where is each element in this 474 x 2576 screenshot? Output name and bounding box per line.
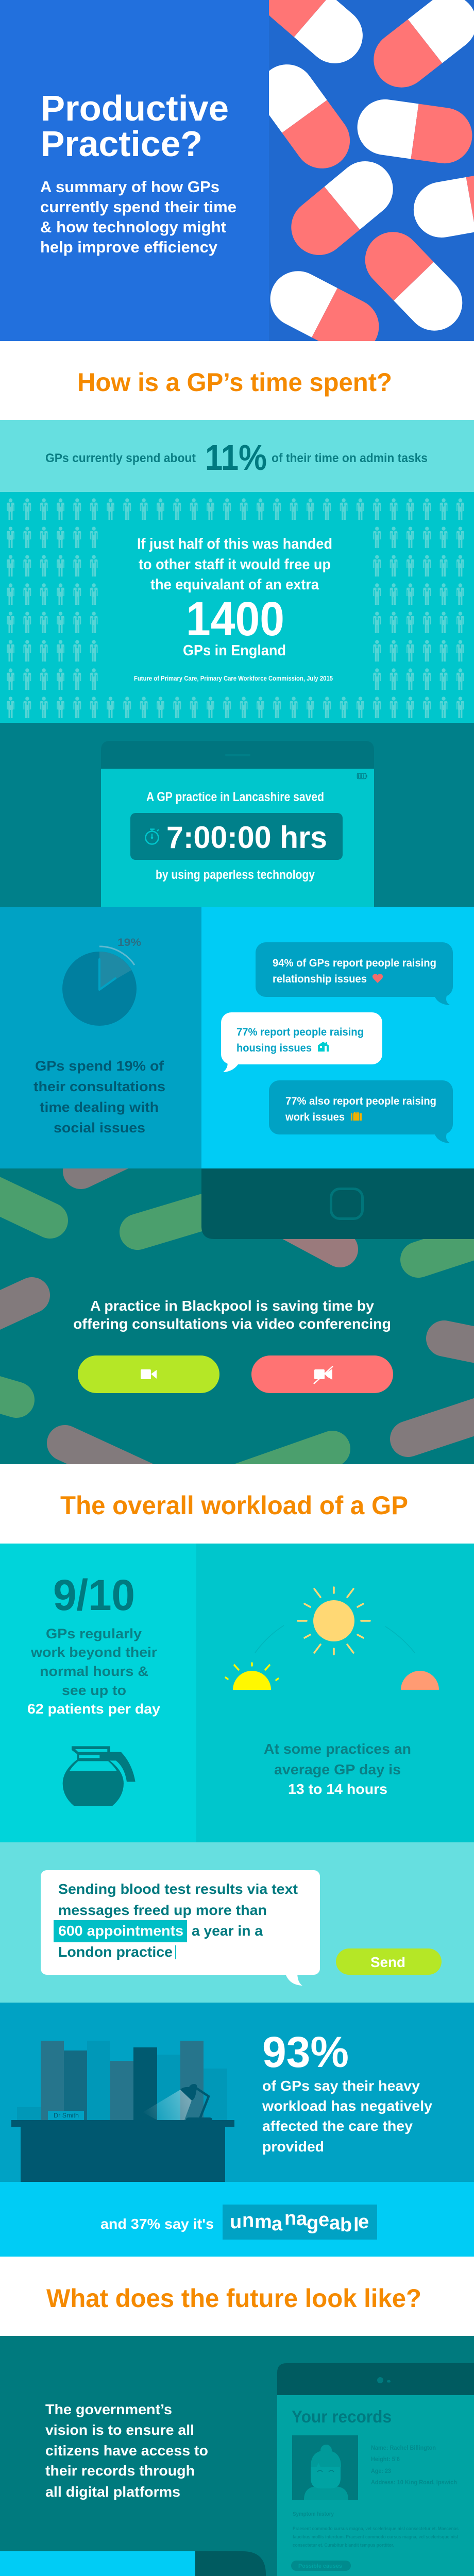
- send button: [336, 1948, 442, 1975]
- symptom history: Praesent commodo cursus magna, vel scelerisque nisl consectetur et. Maecenas: [293, 2526, 459, 2531]
- extra GPs text: GPs in England: [183, 642, 286, 659]
- social issues text: social issues: [54, 1120, 145, 1136]
- panel: text message callout: [0, 1842, 474, 2003]
- people pattern: [6, 498, 473, 719]
- icon: coffee pot: [63, 1746, 136, 1806]
- subtitle: currently spend their time: [40, 198, 236, 216]
- panel: unmanageable: and 37% say it's: [100, 2216, 214, 2232]
- vision text: all digital platforms: [45, 2484, 180, 2500]
- vision text: citizens have access to: [45, 2443, 208, 2459]
- icon: rising sun: [226, 1663, 278, 1690]
- name plate: [48, 2111, 84, 2120]
- subtitle: A summary of how GPs: [40, 178, 219, 196]
- GP day text: [264, 1741, 411, 1797]
- message bubble: a year in a: [192, 1923, 263, 1939]
- icon: desk lamp: [180, 2084, 212, 2120]
- panel: video conferencing: [0, 1168, 474, 1464]
- bubble: housing issues: housing issues: [236, 1042, 312, 1054]
- social issues text: [33, 1058, 165, 1136]
- message bubble: 600 appointments: [58, 1923, 183, 1939]
- subtitle: help improve efficiency: [40, 238, 218, 256]
- icon: heart: [373, 974, 383, 983]
- panel: 9 out of 10 GPs: 9/10: [53, 1571, 135, 1619]
- patient portrait: [292, 2435, 358, 2500]
- pills illustration: [269, 0, 474, 341]
- bubble: relationship issues: 94% of GPs report people raising: [273, 957, 436, 969]
- social issues text: GPs spend 19% of: [35, 1058, 164, 1074]
- timer box: 7:00:00 hrs: [166, 820, 327, 855]
- panel: real time data: [0, 2551, 474, 2576]
- bubble: relationship issues: [256, 942, 453, 1005]
- panel: unmanageable: [0, 2182, 474, 2257]
- 93 percent text: provided: [262, 2139, 324, 2155]
- panel: extra GPs with people pattern: [0, 492, 474, 723]
- icon: battery: [358, 773, 367, 779]
- send button: Send: [370, 1954, 405, 1970]
- extra GPs text: Future of Primary Care, Primary Care Workforce Commission, July 2015: [134, 674, 333, 682]
- extra GPs text: to other staff it would free up: [139, 556, 331, 573]
- panel: length of a GP day: [196, 1544, 474, 1842]
- tablet caption: by using paperless technology: [156, 868, 315, 882]
- icon: stopwatch: [145, 829, 159, 844]
- symptom history: faucibus mollis interdum. Praesent commodo cursus magna, vel scelerisque nisl: [293, 2534, 458, 2539]
- bubble: housing issues: 77% report people raising: [236, 1026, 364, 1038]
- title: Productive: [41, 88, 229, 128]
- GP day text: average GP day is: [274, 1761, 401, 1777]
- extra GPs text: If just half of this was handed: [137, 536, 332, 552]
- extra GPs text: the equivalant of an extra: [150, 577, 319, 593]
- symptom history: consectetur et. Curabitur blandit tempus porttitor.: [293, 2543, 394, 2548]
- panel: government vision: [0, 2336, 474, 2576]
- panel: 9 out of 10 GPs: [0, 1544, 196, 1842]
- desk: [11, 2120, 234, 2182]
- books: [17, 2041, 227, 2120]
- overtime text: see up to: [62, 1683, 126, 1698]
- extra GPs text: 1400: [186, 592, 284, 646]
- message bubble: London practice: [58, 1944, 173, 1960]
- bubble: housing issues: [221, 1012, 382, 1072]
- bubble: work issues: [269, 1080, 453, 1143]
- overtime text: [27, 1626, 160, 1717]
- overtime text: normal hours &: [40, 1664, 148, 1679]
- patient details: Age: 23: [371, 2467, 391, 2475]
- vision text: [45, 2401, 208, 2500]
- phone bottom: [201, 1168, 474, 1239]
- pie chart 19%: [62, 937, 141, 1026]
- panel: admin tasks stat: 11%: [205, 437, 267, 478]
- message bubble: messages freed up more than: [58, 1902, 267, 1918]
- overtime text: 62 patients per day: [27, 1701, 160, 1717]
- wavy word: unmanageable: [230, 2208, 369, 2236]
- pie chart 19%: 19%: [117, 937, 141, 948]
- subtitle: [40, 178, 236, 256]
- vision text: their records through: [45, 2463, 195, 2479]
- panel: admin tasks stat: GPs currently spend about: [45, 451, 196, 465]
- tablet: your records: [277, 2363, 474, 2576]
- 93 percent text: of GPs say their heavy: [262, 2078, 420, 2094]
- 93 percent text: affected the care they: [262, 2118, 413, 2134]
- GP day text: At some practices an: [264, 1741, 411, 1757]
- icon: briefcase: [351, 1112, 362, 1121]
- tablet: [101, 741, 374, 769]
- sun arcs: [255, 1625, 415, 1653]
- panel: admin tasks stat: [0, 420, 474, 492]
- vision text: The government’s: [45, 2401, 172, 2417]
- possible causes button: Possible causes: [298, 2563, 342, 2569]
- tablet text: A GP practice in Lancashire saved: [146, 790, 324, 804]
- title: Practice?: [41, 124, 202, 164]
- symptom history: Symptom history: [293, 2511, 334, 2517]
- phone bezel: [195, 2551, 266, 2576]
- background capsule pattern: [0, 1168, 474, 1464]
- timer box: [130, 813, 343, 860]
- overtime text: GPs regularly: [46, 1626, 142, 1641]
- icon: house: [318, 1042, 329, 1052]
- message bubble: [41, 1870, 320, 1986]
- GP day text: 13 to 14 hours: [288, 1781, 387, 1797]
- panel: 93 percent workload: [0, 2003, 474, 2182]
- title: [41, 88, 229, 164]
- 93 percent text: workload has negatively: [262, 2098, 432, 2114]
- patient details: Height: 5’6: [371, 2455, 400, 2463]
- extra GPs text: [134, 536, 333, 682]
- 93 percent text: 93%: [262, 2028, 349, 2076]
- social issues text: their consultations: [33, 1079, 165, 1094]
- vision text: vision is to ensure all: [45, 2422, 194, 2438]
- subtitle: & how technology might: [40, 218, 226, 236]
- patient details: Address: 10 King Road, Ipswich: [371, 2479, 457, 2486]
- heading: how is a GP's time spent: How is a GP’s time spent?: [77, 368, 392, 397]
- hero panel: [0, 0, 474, 364]
- 93 percent text: [262, 2028, 432, 2155]
- icon: midday sun: [298, 1587, 370, 1654]
- possible causes button: [291, 2561, 351, 2571]
- bubble: work issues: work issues: [285, 1111, 345, 1123]
- heading: overall workload: The overall workload of a GP: [60, 1491, 408, 1520]
- panel: social issues: [0, 907, 201, 1168]
- video conferencing text: [73, 1298, 391, 1332]
- patient details: [371, 2444, 457, 2486]
- video conferencing text: offering consultations via video conferencing: [73, 1316, 391, 1332]
- bubble: relationship issues: relationship issues: [273, 973, 367, 985]
- heading: future: What does the future look like?: [46, 2284, 421, 2313]
- social issues text: time dealing with: [40, 1099, 159, 1115]
- button: start video: [78, 1355, 219, 1393]
- icon: setting sun: [401, 1671, 439, 1690]
- panel: paperless technology tablet: [0, 723, 474, 907]
- name plate: Dr Smith: [54, 2113, 79, 2119]
- symptom history: [293, 2511, 459, 2548]
- video conferencing text: A practice in Blackpool is saving time by: [90, 1298, 374, 1314]
- button: end video: [251, 1355, 393, 1393]
- overtime text: work beyond their: [30, 1645, 158, 1660]
- lamp light beam: [143, 2090, 192, 2120]
- panel: speech bubbles: [201, 907, 474, 1168]
- message bubble: Sending blood test results via text: [58, 1881, 298, 1897]
- tablet: your records: Your records: [292, 2407, 392, 2426]
- panel: admin tasks stat: of their time on admin tasks: [272, 451, 428, 465]
- bubble: work issues: 77% also report people raising: [285, 1095, 436, 1107]
- patient details: Name: Rachel Billington: [371, 2444, 436, 2451]
